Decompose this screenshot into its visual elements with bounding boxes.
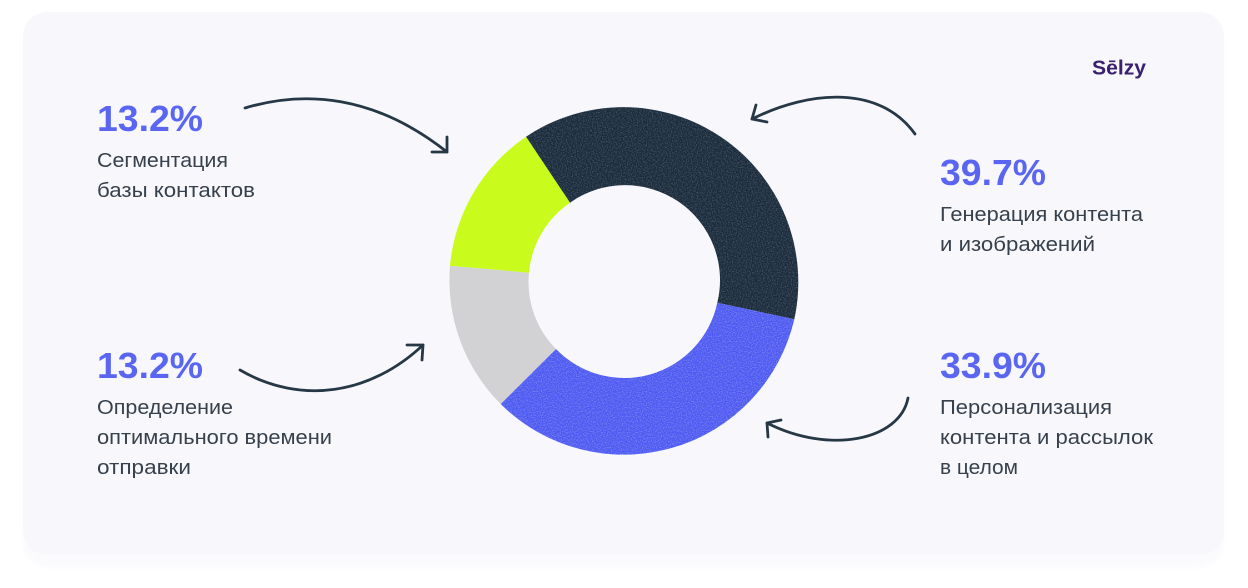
stat: send time 13.2%: 13.2% (97, 345, 203, 386)
stat: segmentation 13.2%: базы контактов (97, 180, 255, 202)
stat: generation 39.7%: и изображений (940, 234, 1095, 256)
stat: segmentation 13.2%: 13.2% (97, 98, 203, 139)
segment: content and image generation 39.7% (526, 107, 798, 319)
arrow: personalization to donut (767, 398, 908, 440)
stat: personalization 33.9%: 33.9% (940, 345, 1046, 386)
stat: personalization 33.9%: Персонализация (940, 397, 1112, 419)
stat: send time 13.2% (97, 345, 332, 479)
segment: optimal send time 13.2% (449, 266, 556, 404)
logo: Selzy: Sēlzy (1092, 56, 1147, 80)
donut chart (449, 107, 798, 455)
segment: personalization 33.9% (501, 303, 794, 455)
stat: send time 13.2%: Определение (97, 397, 233, 419)
stat: send time 13.2%: отправки (97, 457, 191, 479)
stat: generation 39.7%: 39.7% (940, 152, 1046, 193)
stat: personalization 33.9%: контента и рассылок (940, 427, 1153, 449)
stat: generation 39.7% (940, 152, 1144, 256)
stat: send time 13.2%: оптимального времени (97, 427, 332, 449)
arrow: segmentation to donut (245, 99, 447, 152)
arrow: generation to donut (752, 97, 915, 134)
stat: personalization 33.9%: в целом (940, 457, 1018, 479)
stat: personalization 33.9% (940, 345, 1153, 479)
stat: segmentation 13.2% (97, 98, 255, 202)
stat: segmentation 13.2%: Сегментация (97, 150, 228, 172)
arrow: send time to donut (240, 345, 423, 391)
stat: generation 39.7%: Генерация контента (940, 204, 1144, 226)
segment: contact segmentation 13.2% (450, 137, 570, 273)
